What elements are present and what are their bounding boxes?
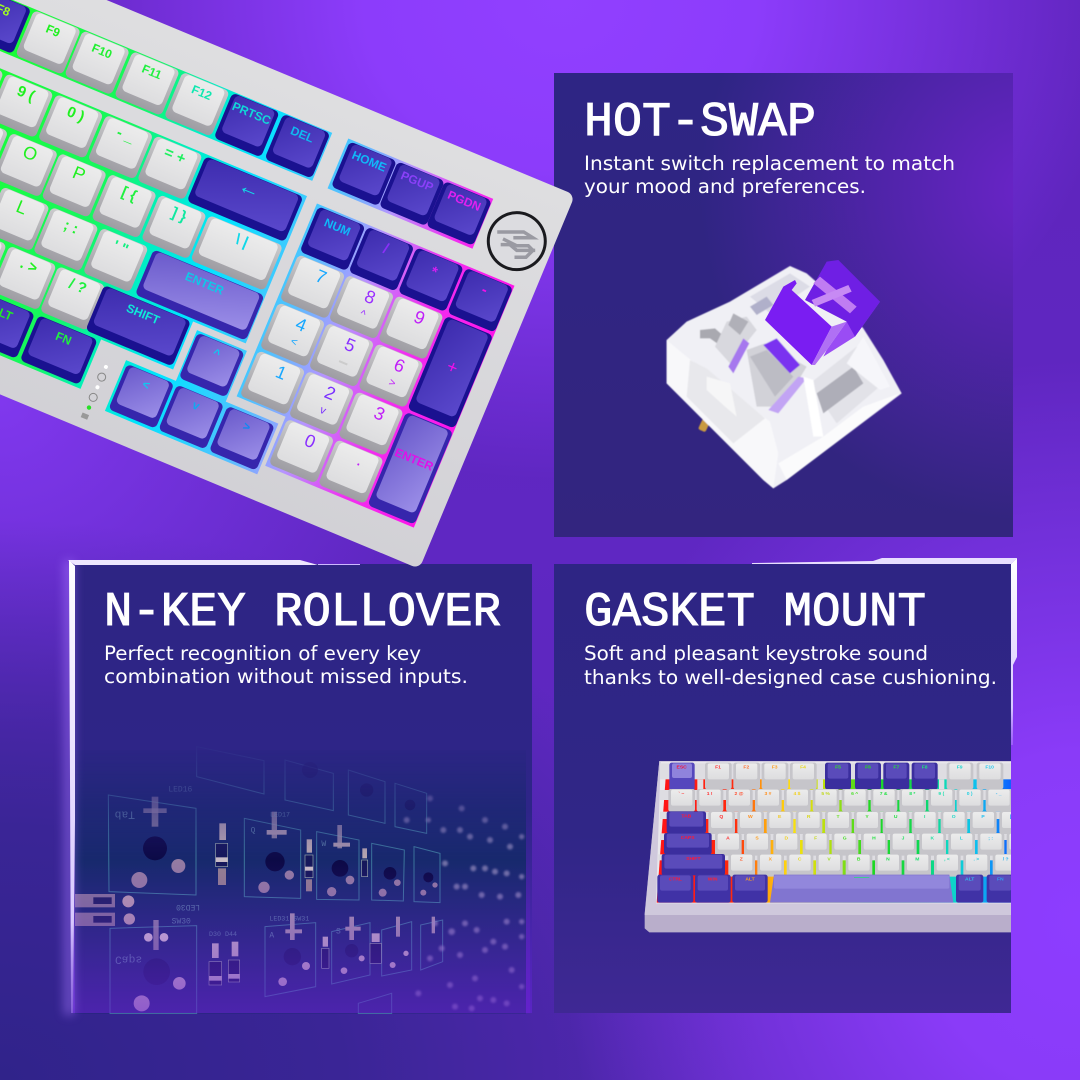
- image: keyboard circuit board: [75, 747, 526, 1013]
- key row: function keys: F3: [772, 765, 778, 771]
- numeric keypad: 9: [411, 306, 428, 329]
- numeric keypad: -: [479, 281, 490, 299]
- key row: modifiers and spacebar: FN: [997, 877, 1004, 883]
- key row: asdf: K: [931, 836, 935, 842]
- navigation keys: PGUP: [399, 168, 436, 194]
- function key row: PRTSC: [230, 99, 273, 128]
- key row: qwerty: TAB: [681, 813, 692, 819]
- text block: n-key rollover description: Perfect recognition of every key: [104, 642, 421, 665]
- key row: numbers: 3 #: [765, 791, 772, 797]
- key row: asdf: J: [902, 836, 905, 842]
- numeric keypad: +: [444, 356, 461, 378]
- key row: asdf: A: [726, 836, 730, 842]
- key row: asdf: F: [814, 836, 817, 842]
- numeric keypad: 8: [362, 286, 379, 308]
- heading: hot-swap: HOT-SWAP: [584, 96, 816, 150]
- text block: gasket mount description: Soft and pleasant keystroke sound: [584, 642, 928, 665]
- key row: numbers: 4 $: [794, 791, 801, 797]
- numeric keypad: v: [318, 404, 328, 417]
- key row: zxcv: B: [857, 857, 861, 863]
- key row: asdf: G: [843, 836, 847, 842]
- image: keyboard circuit board: D30 D44: [209, 930, 237, 938]
- image: front view of keyboard with rainbow backlight: [645, 761, 1033, 932]
- blurred far-field solder joints: [404, 795, 524, 1011]
- image: keyboard circuit board: LED30: [176, 902, 200, 911]
- glowing frame: n-key rollover: [64, 560, 360, 1015]
- shift key row: [0, 225, 191, 366]
- text block: gasket mount description: [584, 642, 997, 689]
- text block: hot-swap description: your mood and preferences.: [584, 175, 866, 198]
- key row: zxcv: M: [915, 857, 919, 863]
- image: keyboard circuit board: A: [269, 931, 274, 940]
- numeric keypad: .: [354, 450, 366, 470]
- qwerty key row: \ |: [233, 231, 251, 251]
- key row: function keys: F2: [743, 765, 749, 771]
- key row: function keys: F7: [893, 765, 899, 771]
- key row: modifiers and spacebar: WIN: [708, 877, 718, 883]
- panel: n-key rollover: [64, 560, 532, 1015]
- underglow outlines: [0, 0, 542, 538]
- panel: gasket mount: [554, 558, 1033, 1013]
- home key row: ; :: [61, 217, 81, 238]
- numeric keypad: ^: [358, 308, 368, 321]
- numeric keypad: 5: [342, 334, 359, 356]
- home key row: [0, 166, 265, 341]
- number key row: = +: [162, 144, 188, 168]
- key row: numbers: 7 &: [880, 791, 888, 797]
- numeric keypad: >: [387, 376, 397, 390]
- key row: zxcv: / ?: [1003, 857, 1009, 863]
- key row: zxcv: [662, 854, 1019, 877]
- bottom key row: [0, 290, 98, 385]
- key row: qwerty: O: [952, 814, 956, 820]
- shift key row: / ?: [66, 275, 89, 298]
- key row: numbers: 6 ^: [851, 791, 858, 797]
- shift key row: . >: [18, 255, 40, 277]
- key row: asdf: S: [755, 836, 759, 842]
- qwerty key row: P: [70, 162, 88, 185]
- key row: function keys: F6: [865, 765, 871, 771]
- image: keyboard circuit board: LED31 SW31: [269, 915, 309, 923]
- arrow keys: ^: [211, 346, 223, 361]
- navigation keys: PGDN: [446, 188, 483, 214]
- number key row: ←: [235, 172, 265, 204]
- text block: hot-swap description: [584, 152, 955, 198]
- key row: zxcv: V: [827, 857, 831, 863]
- key row: numbers: 8 *: [909, 791, 915, 797]
- key row: asdf: CAPS: [681, 835, 695, 841]
- heading: gasket mount: GASKET MOUNT: [584, 586, 926, 640]
- key row: zxcv: X: [769, 857, 773, 863]
- key row: numbers: 9 (: [938, 791, 945, 797]
- numeric keypad: 0: [302, 430, 319, 452]
- key row: zxcv: . >: [973, 857, 979, 863]
- key row: asdf: [664, 833, 1033, 856]
- key row: modifiers and spacebar: CTRL: [669, 877, 682, 883]
- function key row: F10: [90, 41, 114, 62]
- arrow keys: <: [140, 377, 152, 393]
- image: keyboard circuit board: W: [321, 840, 326, 849]
- image: keyboard circuit board: Tab: [114, 808, 135, 820]
- image: keyboard circuit board: Q: [251, 827, 256, 836]
- numeric keypad: 7: [313, 266, 330, 288]
- image: angled keyboard with neon underglow: [0, 0, 575, 569]
- navigation keys: HOME: [350, 148, 388, 175]
- text block: n-key rollover description: combination without missed inputs.: [104, 665, 468, 688]
- glowing frame: gasket mount: [752, 558, 1017, 745]
- image: keyboard circuit board: Caps: [115, 953, 142, 965]
- key row: numbers: 5 %: [821, 791, 831, 797]
- text block: n-key rollover description: [104, 642, 468, 688]
- function key row: [0, 0, 330, 179]
- key row: numbers: - _: [996, 791, 1002, 797]
- key row: numbers: 1 !: [707, 791, 713, 797]
- key row: asdf: ; :: [988, 836, 993, 842]
- numeric keypad: 2: [322, 382, 339, 404]
- arrow keys: v: [190, 398, 202, 413]
- key row: asdf: L: [960, 836, 963, 842]
- key row: function keys: ESC: [677, 765, 687, 771]
- image: keyboard circuit board: S: [336, 927, 341, 936]
- home key row: ENTER: [183, 269, 226, 298]
- number key row: [0, 52, 303, 242]
- numeric keypad: 1: [273, 362, 290, 384]
- key row: function keys: F5: [835, 765, 841, 771]
- qwerty key row: O: [20, 141, 40, 165]
- key row: qwerty: I: [924, 814, 926, 820]
- home key row: ' ": [111, 237, 131, 259]
- key row: modifiers and spacebar: [657, 875, 1014, 903]
- key row: asdf: H: [872, 836, 876, 842]
- numeric keypad: /: [381, 240, 392, 258]
- key row: zxcv: N: [886, 857, 890, 863]
- function key row: F11: [140, 62, 164, 82]
- shift key row: SHIFT: [124, 301, 162, 328]
- key row: zxcv: C: [798, 857, 802, 863]
- key row: zxcv: Z: [740, 857, 743, 863]
- qwerty key row: [ {: [119, 183, 139, 205]
- numeric keypad: NUM: [322, 215, 353, 239]
- heading: n-key rollover: N-KEY ROLLOVER: [104, 586, 501, 640]
- icon: transparent mechanical switch with purple stem: [667, 260, 902, 488]
- function key row: F9: [44, 22, 62, 40]
- icon: volume knob with logo: [478, 202, 556, 280]
- numeric keypad: 4: [293, 314, 310, 336]
- function key row: DEL: [289, 123, 316, 146]
- key row: function keys: F9: [957, 765, 963, 771]
- numeric keypad: 3: [371, 402, 388, 425]
- key row: qwerty: T: [836, 814, 840, 820]
- key row: qwerty: U: [894, 814, 898, 820]
- numeric keypad: 6: [391, 354, 408, 377]
- key row: function keys: F8: [922, 765, 928, 771]
- key row: function keys: F4: [800, 765, 806, 771]
- bottom key row: FN: [54, 329, 74, 348]
- key row: function keys: [669, 763, 1003, 791]
- arrow keys: [108, 312, 296, 471]
- home key row: L: [13, 196, 30, 219]
- key row: modifiers and spacebar: ALT: [745, 877, 755, 883]
- key row: qwerty: Q: [719, 814, 723, 820]
- numeric keypad: [220, 206, 513, 525]
- key row: zxcv: , <: [944, 857, 950, 863]
- backlight glow: [657, 773, 1011, 903]
- key row: qwerty: Y: [865, 814, 869, 820]
- image: keyboard circuit board: SW30: [172, 917, 191, 926]
- key row: qwerty: [ {: [1010, 814, 1015, 820]
- key row: asdf: D: [785, 836, 789, 842]
- function key row: F12: [189, 82, 214, 103]
- number key row: - _: [114, 124, 137, 147]
- key row: modifiers and spacebar: ALT: [965, 877, 974, 883]
- number key row: 9 (: [14, 82, 37, 105]
- image: keyboard circuit board: LED16: [168, 786, 192, 795]
- key row: function keys: F10: [985, 765, 994, 771]
- numeric keypad: *: [428, 263, 440, 281]
- navigation keys: [331, 141, 492, 246]
- key row: function keys: F1: [715, 765, 721, 771]
- qwerty key row: [0, 112, 283, 291]
- key row: qwerty: W: [748, 814, 753, 820]
- text block: hot-swap description: Instant switch replacement to match: [584, 152, 955, 175]
- key row: numbers: 0 ): [967, 791, 973, 797]
- key row: numbers: ` ~: [678, 791, 684, 797]
- key row: qwerty: [667, 811, 1026, 834]
- text block: gasket mount description: thanks to well-designed case cushioning.: [584, 666, 997, 689]
- key row: numbers: 2 @: [734, 791, 744, 797]
- key row: qwerty: R: [807, 814, 811, 820]
- arrow keys: >: [241, 419, 253, 434]
- image: keyboard circuit board: LED17: [270, 811, 290, 819]
- keyboard case: [0, 0, 575, 569]
- indicator lights: [81, 364, 110, 420]
- key row: qwerty: E: [778, 814, 782, 820]
- qwerty key row: ] }: [169, 204, 189, 226]
- key row: numbers: [668, 789, 1012, 812]
- key row: qwerty: P: [981, 814, 985, 820]
- number key row: 0 ): [64, 103, 87, 126]
- numeric keypad: <: [289, 335, 299, 349]
- panel: hot-swap: [554, 73, 1013, 537]
- key row: zxcv: SHIFT: [686, 856, 701, 862]
- numeric keypad: ENTER: [393, 445, 436, 474]
